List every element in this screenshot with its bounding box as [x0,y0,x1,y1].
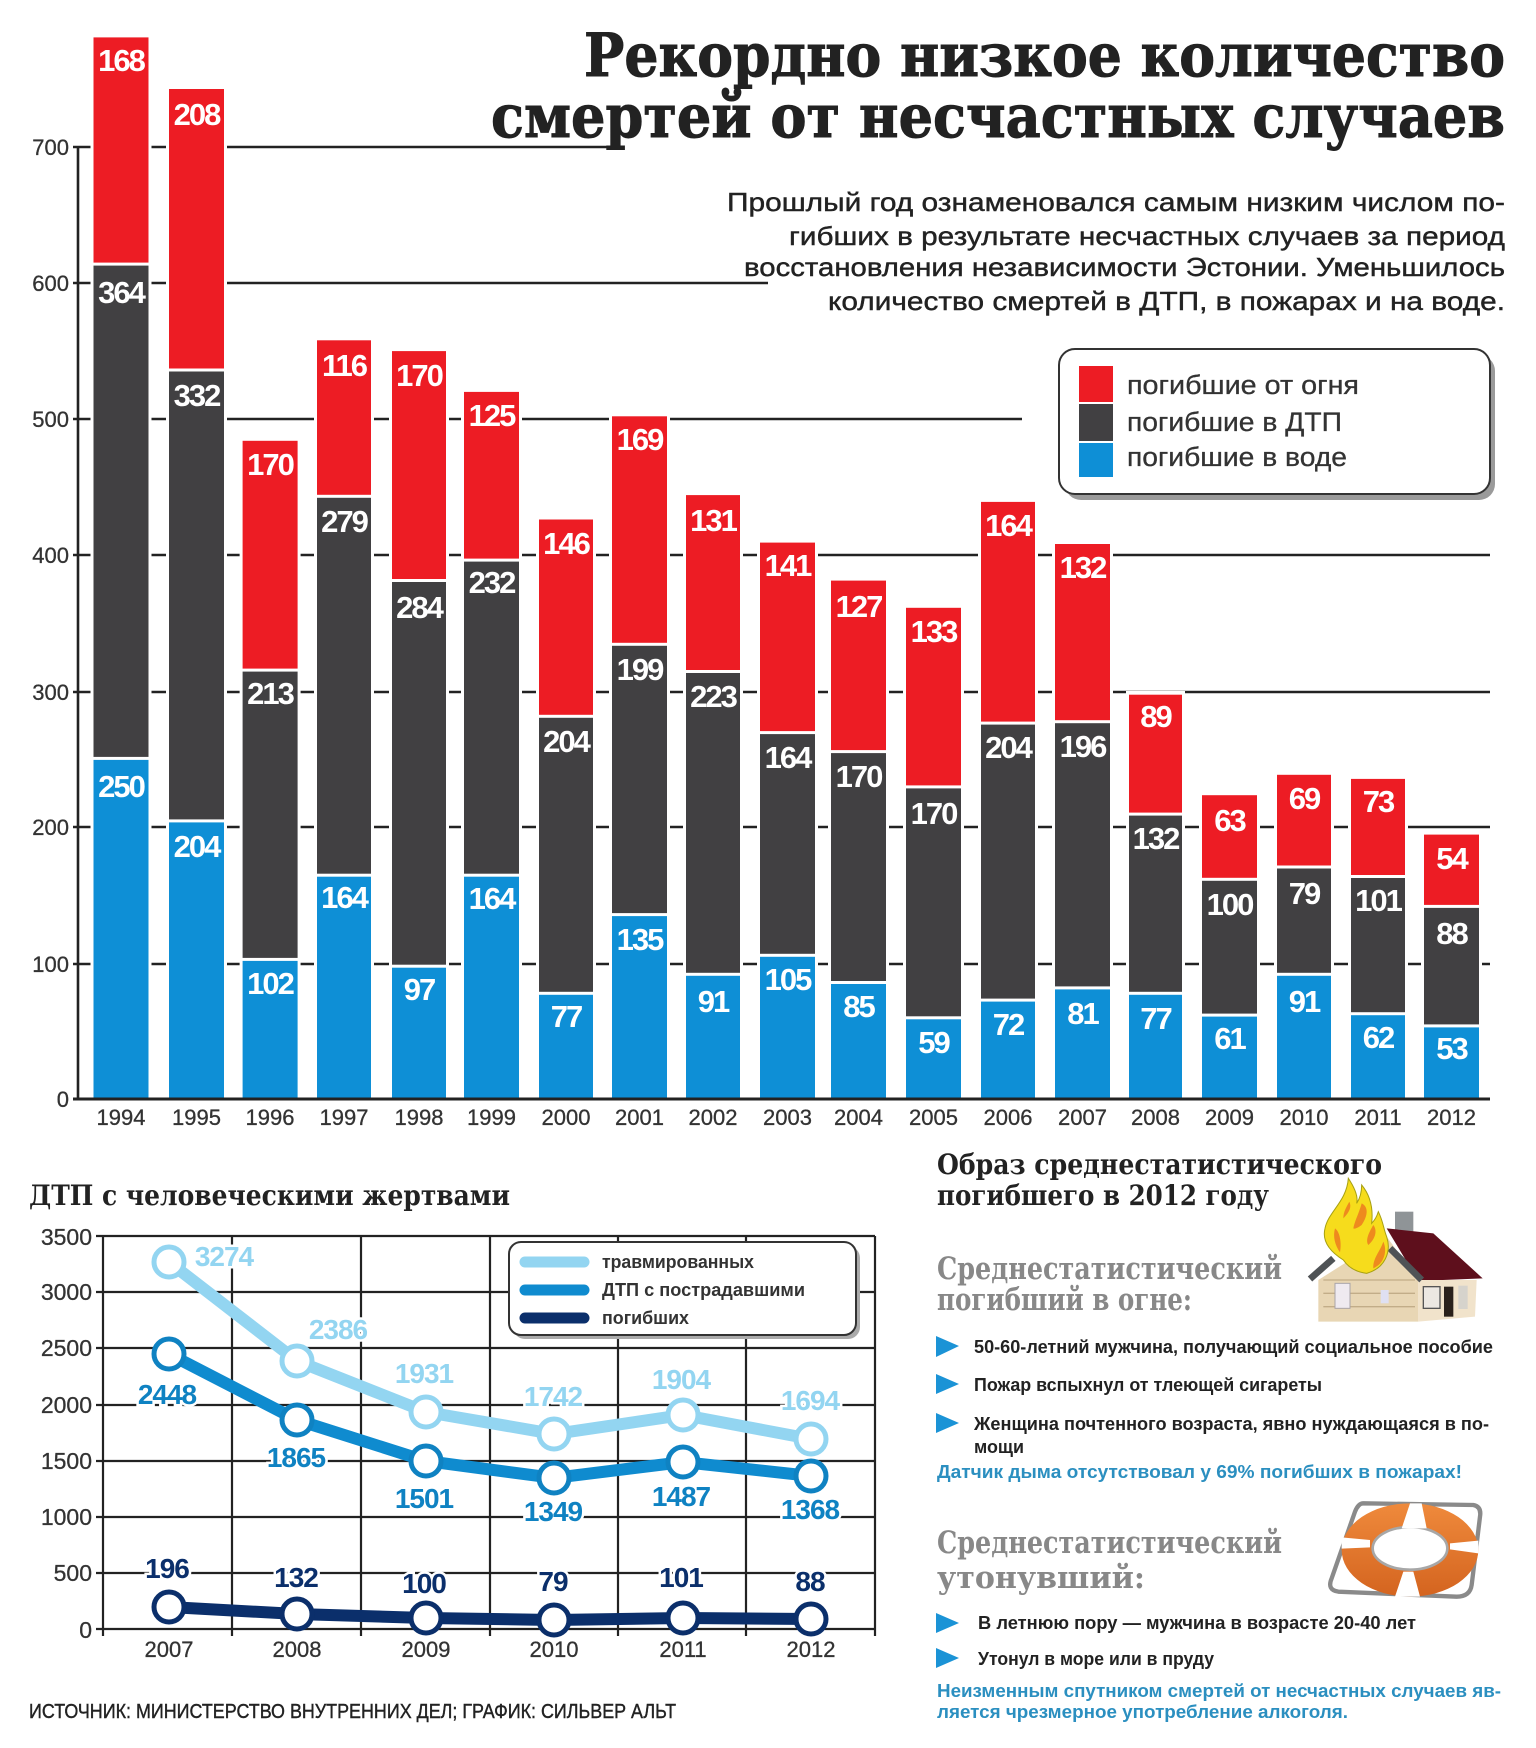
legend: bar chart: погибшие в ДТП [1127,407,1342,437]
series: accidents with casualties: 1349 [524,1496,583,1527]
x axis years: 1995 [172,1105,221,1130]
bar 2001: 199 [617,652,664,687]
bar 2007: 132 [1060,550,1106,585]
bar 1997: 116 [322,348,368,383]
panel heading [937,1148,1382,1212]
series: accidents with casualties: 1368 [781,1494,840,1525]
bar 1994 [90,33,152,1099]
x axis years: 2001 [615,1105,664,1130]
bar 2006: 164 [985,508,1034,543]
subheading: drowned: утонувший: [937,1560,1145,1596]
bar 2012: 54 [1436,841,1469,876]
icon: burning house [1310,1178,1483,1322]
y axis with labels: 500 [32,407,69,432]
bar 2003 [757,539,818,1099]
x axis years: 2008 [1131,1105,1180,1130]
alcohol callout [937,1681,1501,1722]
x axis years: 2007 [1058,1105,1107,1130]
bar 2010: 91 [1289,984,1321,1019]
bar 1998: 284 [396,590,445,625]
bar 2002: 131 [690,503,738,538]
bar 2000: 77 [551,999,582,1034]
intro text: восстановления независимости Эстонии. Уменьшилось [744,252,1505,282]
bar 2001 [609,412,670,1099]
series: injured [154,1241,841,1454]
bar 2009 [1199,792,1260,1099]
legend: bar chart: погибшие в воде [1127,442,1347,472]
y axis labels: 3500 [41,1224,92,1250]
legend: bar chart: погибшие от огня [1127,370,1359,400]
y axis with labels: 700 [32,135,69,160]
bar 1996: 170 [247,447,294,482]
bar 2001: 135 [617,922,664,957]
subheading: drowned [937,1525,1282,1596]
bar 2009: 61 [1214,1021,1246,1056]
fire bullet list: мощи [974,1437,1024,1457]
bar 2011: 62 [1363,1020,1394,1055]
bar 1997: 164 [321,880,370,915]
series: killed: 196 [145,1553,189,1584]
x axis labels: 2008 [273,1637,321,1662]
bar 1999: 125 [469,398,516,433]
bar 2010: 69 [1289,781,1321,816]
bar 1996 [240,437,301,1099]
series: injured: 1931 [395,1358,454,1389]
drowning bullet list [936,1613,1416,1669]
series: accidents with casualties [138,1339,840,1527]
legend: bar chart [1059,349,1495,500]
fire callout: Датчик дыма отсутствовал у 69% погибших в пожарах! [937,1462,1462,1482]
x axis years: 2004 [834,1105,883,1130]
bar 2005: 59 [918,1025,950,1060]
y axis with labels: 100 [32,952,69,977]
bar 2011: 73 [1363,784,1395,819]
y axis with labels [32,135,78,1112]
x axis years: 2005 [909,1105,958,1130]
x axis years: 2011 [1354,1105,1402,1130]
y axis labels: 2500 [41,1335,92,1361]
x axis years: 2003 [763,1105,812,1130]
x axis years: 2012 [1427,1105,1476,1130]
bar 1997 [314,336,374,1099]
bar 1994: 364 [98,275,147,310]
y axis with labels: 0 [57,1087,69,1112]
bar 1998: 170 [396,358,443,393]
legend: line chart: травмированных [602,1252,754,1272]
bar 1995: 204 [174,829,222,864]
series: injured: 2386 [309,1314,368,1345]
bar 2004: 85 [843,989,875,1024]
y axis labels: 1500 [41,1448,92,1474]
intro text [727,187,1505,316]
x axis years: 1998 [395,1105,443,1130]
bar 2008 [1126,691,1185,1099]
subheading: fire victim: Среднестатистический [937,1251,1282,1287]
bar 2001: 169 [617,422,664,457]
y axis labels: 500 [54,1560,92,1586]
bar 2000: 204 [543,724,592,759]
drowning bullet list: Утонул в море или в пруду [978,1649,1214,1669]
series: injured: 3274 [195,1241,255,1272]
bar 1996: 213 [247,676,295,711]
fire bullet list: Женщина почтенного возраста, явно нуждающаяся в по- [973,1414,1489,1434]
bar 2007: 196 [1060,729,1107,764]
bar 1999: 164 [469,881,517,916]
bar 1995: 208 [174,97,221,132]
bar 2010: 79 [1289,876,1321,911]
bar 2012: 88 [1436,916,1468,951]
x axis labels: 2007 [145,1637,193,1662]
source line: ИСТОЧНИК: МИНИСТЕРСТВО ВНУТРЕННИХ ДЕЛ; ГРАФИК: СИЛЬВЕР АЛЬТ [29,1701,676,1723]
subheading: fire victim: погибший в огне: [937,1282,1192,1318]
bar 2006 [978,498,1038,1099]
bar 1999 [461,388,522,1099]
x axis years: 2009 [1205,1105,1254,1130]
stacked bar chart: deaths 1994-2012 [32,33,1490,1130]
title [491,21,1505,152]
intro text: гибших в результате несчастных случаев за период [789,221,1505,251]
series: killed: 88 [795,1566,825,1597]
bar 1997: 279 [321,504,369,539]
bar 2009: 100 [1207,887,1253,922]
bar 2009: 63 [1214,803,1246,838]
bar 2002: 91 [698,984,730,1019]
bar 2003: 141 [765,548,812,583]
bar 2012: 53 [1436,1031,1468,1066]
x axis years: 1996 [246,1105,294,1130]
series: injured: 1904 [652,1364,712,1395]
x axis years: 1997 [320,1105,368,1130]
bar 2007: 81 [1067,996,1099,1031]
bar 2002 [683,491,743,1099]
bar 2000 [536,516,596,1099]
series: injured: 1742 [524,1381,583,1412]
bar 2003: 164 [765,740,813,775]
legend: line chart: погибших [602,1308,689,1328]
bar 2003: 105 [765,962,812,997]
bar 2010 [1274,771,1334,1099]
bar 2011 [1348,775,1408,1099]
fire bullet list [936,1336,1493,1457]
heading: road accidents: ДТП с человеческими жертвами [29,1179,510,1212]
bar 2011: 101 [1355,883,1403,918]
x axis years: 2002 [689,1105,737,1130]
bar 2007 [1052,540,1113,1099]
bar 2008: 89 [1140,699,1172,734]
bar 2000: 146 [543,526,591,561]
series: accidents with casualties: 1865 [267,1442,326,1473]
bar 2005: 133 [911,614,958,649]
series: killed: 101 [659,1562,703,1593]
icon: lifebuoy [1330,1503,1480,1597]
panel: average victim 2012 [936,1148,1501,1722]
x axis labels: 2011 [659,1637,707,1662]
alcohol callout: Неизменным спутником смертей от несчастных случаев яв- [937,1681,1501,1701]
drowning bullet list: В летнюю пору — мужчина в возрасте 20-40 лет [978,1613,1416,1633]
subheading: drowned: Среднестатистический [937,1525,1282,1561]
subheading: fire victim [937,1251,1282,1318]
x axis years: 1994 [97,1105,145,1130]
series: accidents with casualties: 2448 [138,1379,197,1410]
intro text: Прошлый год ознаменовался самым низким числом по- [727,187,1505,217]
x axis labels [145,1637,835,1662]
series: accidents with casualties: 1501 [395,1483,454,1514]
x axis labels: 2009 [402,1637,450,1662]
series: accidents with casualties: 1487 [652,1481,711,1512]
legend: line chart [509,1242,860,1339]
bar 1998: 97 [404,972,435,1007]
bar 2006: 72 [993,1007,1024,1042]
bar 1999: 232 [469,565,515,600]
bar 1995: 332 [174,378,220,413]
bar 1994: 250 [98,769,145,804]
fire bullet list: Пожар вспыхнул от тлеющей сигареты [974,1375,1322,1395]
y axis with labels: 300 [32,680,69,705]
series: injured: 1694 [781,1385,841,1416]
x axis years: 1999 [467,1105,516,1130]
alcohol callout: ляется чрезмерное употребление алкоголя. [937,1702,1348,1722]
bar 1998 [389,347,449,1099]
y axis labels: 3000 [41,1279,92,1305]
y axis with labels: 600 [32,271,69,296]
bar 2008: 132 [1133,821,1179,856]
y axis with labels: 400 [32,543,69,568]
bar 2005 [903,604,964,1099]
panel heading: погибшего в 2012 году [937,1179,1269,1212]
fire bullet list: 50-60-летний мужчина, получающий социальное пособие [974,1337,1493,1357]
series: killed: 132 [274,1562,318,1593]
bar 2005: 170 [911,796,957,831]
bar 2008: 77 [1140,1001,1171,1036]
line chart: road accidents 2007-2012 [41,1224,875,1662]
x axis labels: 2012 [787,1637,835,1662]
bar 1994: 168 [98,43,146,78]
series: killed [145,1553,826,1635]
x axis years: 2010 [1280,1105,1328,1130]
panel heading: Образ среднестатистического [937,1148,1382,1181]
intro text: количество смертей в ДТП, в пожарах и на воде. [828,286,1505,316]
y axis with labels: 200 [32,815,69,840]
bar 2002: 223 [690,679,738,714]
x axis years [97,1105,1476,1130]
bar 2004 [828,577,889,1099]
bar 2006: 204 [985,730,1034,765]
bar 1995 [166,85,227,1099]
series: killed: 79 [538,1566,568,1597]
y axis labels: 0 [79,1617,92,1643]
x axis years: 2006 [984,1105,1032,1130]
bar 2004: 127 [836,589,882,624]
series: killed: 100 [402,1568,446,1599]
x axis labels: 2010 [530,1637,578,1662]
y axis labels: 2000 [41,1392,92,1418]
bar 2004: 170 [836,759,882,794]
bar 2012 [1421,831,1482,1099]
x axis years: 2000 [542,1105,590,1130]
y axis labels [41,1224,92,1643]
legend: line chart: ДТП с пострадавшими [602,1280,805,1300]
y axis labels: 1000 [41,1504,92,1530]
bar 1996: 102 [247,966,294,1001]
